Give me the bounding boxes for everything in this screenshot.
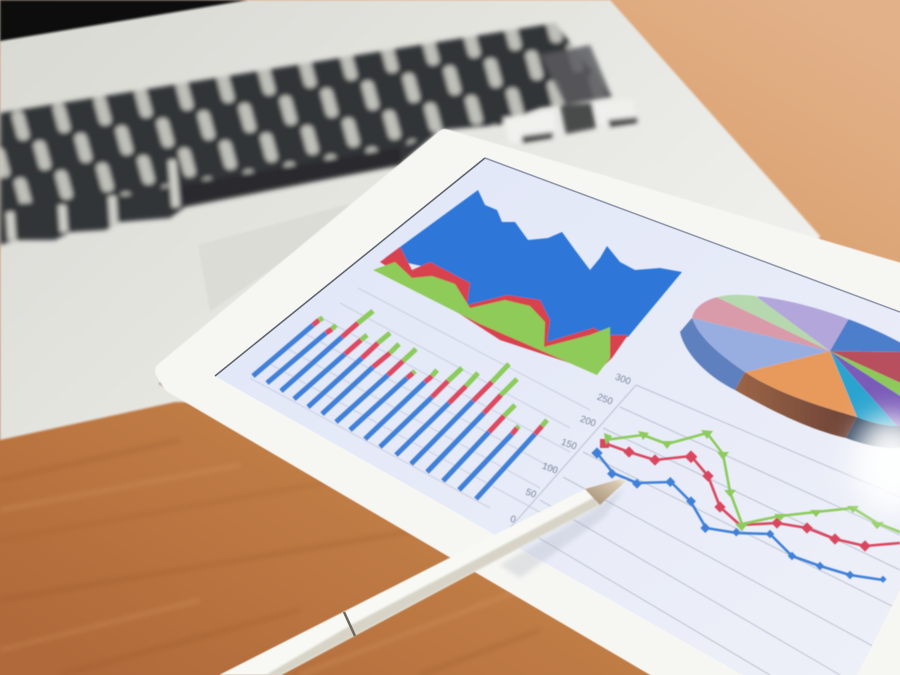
axis value 250: 250 — [596, 392, 614, 408]
keyboard — [0, 0, 640, 245]
line chart gridlines — [510, 385, 900, 675]
slice: purple — [830, 351, 900, 432]
screen glare — [852, 415, 900, 515]
slice: orange — [745, 350, 858, 418]
red series — [600, 439, 900, 552]
blue bars — [253, 325, 535, 499]
pen body — [219, 488, 600, 675]
pen shadow — [500, 487, 625, 578]
pie top slices — [692, 294, 900, 426]
tablet — [158, 138, 900, 675]
side: red sliver — [680, 318, 700, 335]
area chart — [373, 190, 682, 375]
side: brown — [735, 372, 857, 438]
pie side — [680, 318, 900, 448]
pen seam — [344, 612, 355, 636]
laptop screen bezel — [0, 0, 248, 41]
bar chart gridlines — [250, 288, 590, 515]
slice: green — [830, 351, 900, 399]
pen body shading — [266, 497, 600, 675]
bar chart — [250, 288, 590, 515]
tablet screen — [215, 158, 900, 675]
slice: red — [830, 351, 900, 385]
slice: light green — [717, 294, 828, 350]
screen dark edge — [215, 158, 485, 376]
slice: lavender — [757, 296, 848, 351]
axis value 0: 0 — [508, 514, 517, 526]
blue area — [385, 190, 682, 345]
green series — [604, 430, 900, 532]
axis value 50: 50 — [524, 487, 538, 501]
pie chart — [680, 294, 900, 448]
axis value 200: 200 — [579, 414, 597, 430]
tablet edge — [158, 372, 690, 675]
blue series — [591, 447, 887, 583]
axis value 300: 300 — [614, 372, 632, 388]
slice: teal — [830, 351, 897, 426]
red bars — [313, 320, 542, 434]
trackpad — [198, 205, 360, 312]
laptop — [0, 0, 820, 440]
green bars — [319, 311, 547, 428]
pen tip — [585, 479, 627, 505]
axis value 100: 100 — [541, 461, 559, 477]
line chart — [591, 430, 900, 583]
side: blue — [680, 318, 745, 390]
red area — [380, 247, 628, 372]
line chart axis labels — [508, 372, 632, 526]
slice: pink — [692, 296, 829, 351]
tablet body — [164, 138, 900, 675]
axis value 150: 150 — [560, 437, 578, 453]
side: dark — [846, 417, 900, 448]
green area — [373, 262, 610, 375]
slice: light blue — [692, 318, 830, 373]
pen — [219, 479, 627, 675]
slice: blue — [830, 318, 900, 353]
laptop base — [0, 0, 820, 440]
